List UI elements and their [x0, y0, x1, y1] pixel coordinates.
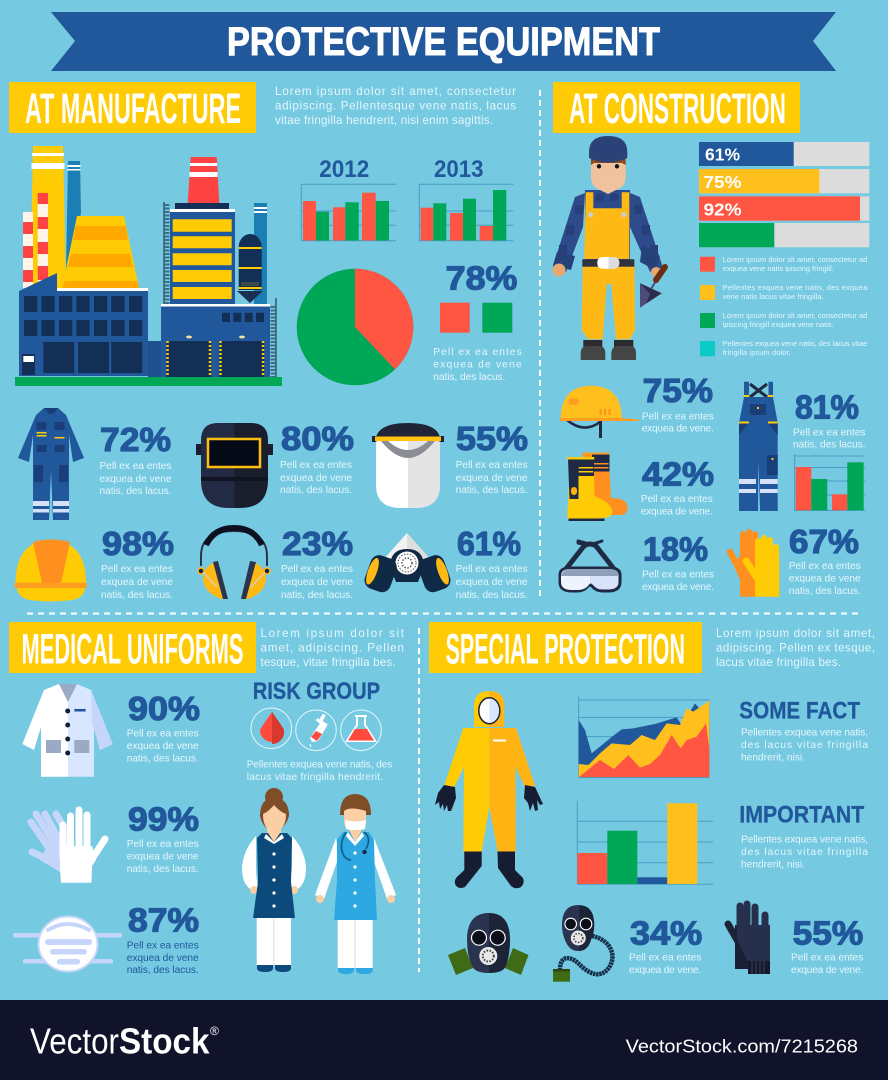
icon: rubber boots [567, 453, 628, 521]
stat: 55%: Pell ex ea entes [456, 460, 528, 471]
stat: 72%: Pell ex ea entes [100, 461, 172, 472]
stat: 78% with legend: 78% [446, 259, 517, 296]
stat: 61%: natis, des lacus. [456, 590, 528, 601]
intro text: special: lacus vitae fringilla bes. [716, 656, 841, 669]
stat: 99%: natis, des lacus. [127, 864, 199, 875]
stat: 55%: natis, des lacus. [456, 485, 528, 496]
icon: bib overalls [739, 382, 778, 511]
chart: 2013 bars: 2013 [434, 156, 484, 183]
text: important: IMPORTANT [739, 801, 865, 828]
stat: 42%: Pell ex ea entes [641, 494, 713, 505]
stat: 55% special [791, 914, 863, 976]
stat: 23% [281, 525, 353, 601]
text: some fact: SOME FACT [739, 698, 860, 725]
stat: 72%: 72% [100, 421, 171, 458]
icon: respirator [362, 533, 453, 595]
stat: 75% [642, 372, 714, 434]
text: important: hendrerit, nisi. [741, 860, 805, 870]
stat: 34% [629, 914, 702, 976]
chart: progress bars: 75% [704, 172, 742, 192]
stat: 23%: Pell ex ea entes [281, 564, 353, 575]
text: risk group: Pellentes exquea vene natis, des [247, 760, 392, 770]
chart: progress bars: 92% [704, 200, 742, 220]
stat: 75%: 75% [643, 372, 713, 409]
stat: 42%: exquea de vene. [641, 506, 713, 518]
icon: syringe [296, 710, 336, 751]
heading: at construction [553, 82, 800, 133]
icon: hard hat [14, 540, 87, 602]
legend: construction: vene natis lacus vitae fringilla. [723, 292, 824, 301]
stat: 81%: 81% [795, 389, 859, 426]
footer watermark bar [0, 1000, 888, 1080]
stat: 80%: natis, des lacus. [280, 485, 352, 496]
stat: 55% [456, 420, 528, 496]
title banner [51, 12, 836, 71]
stat: 34%: Pell ex ea entes [629, 952, 701, 964]
stat: 55% special: Pell ex ea entes [791, 952, 863, 964]
icon: ear muffs [198, 528, 270, 599]
stat: 34%: 34% [630, 914, 702, 951]
text: some fact: hendrerit, nisi. [741, 752, 805, 764]
stat: 87% [127, 902, 199, 976]
chart: 2012 bars: 2012 [319, 156, 369, 183]
stat: 67% [789, 523, 861, 597]
stat: 87%: exquea de vene [127, 953, 199, 964]
stat: 99% [127, 801, 199, 875]
intro text: medical [260, 627, 405, 669]
text: some fact [739, 698, 868, 764]
stat: 98%: natis, des lacus. [101, 590, 173, 601]
stat: 18% [642, 531, 714, 593]
footer watermark bar: Stock [119, 1020, 210, 1061]
stat: 23%: 23% [282, 525, 353, 562]
chart: 2012 bars [301, 156, 396, 241]
stat: 18%: exquea de vene. [642, 582, 714, 593]
icon: welding mask [196, 423, 273, 508]
stat: 90%: Pell ex ea entes [127, 728, 199, 740]
intro text: special [716, 627, 875, 669]
stat: 23%: exquea de vene [281, 577, 353, 588]
illustration: construction worker [552, 136, 665, 360]
intro text: manufacture: vitae fringilla hendrerit, nisi enim sagittis. [275, 114, 493, 127]
icon: surgical mask [13, 916, 122, 972]
icon: black gloves [728, 904, 770, 974]
intro text: special: Lorem ipsum dolor sit amet, [716, 627, 875, 640]
legend: construction: Lorem ipsum dolor sit amet, consectetur ad [723, 311, 867, 320]
title banner: PROTECTIVE EQUIPMENT [227, 20, 660, 64]
stat: 61%: Pell ex ea entes [456, 564, 528, 575]
stat: 99%: 99% [128, 801, 199, 838]
intro text: manufacture [275, 85, 516, 127]
heading: medical uniforms [9, 622, 256, 674]
icon: lab coat [22, 684, 113, 777]
chart: bar chart [577, 801, 713, 884]
figure: nurse [242, 788, 306, 972]
stat: 90%: 90% [128, 690, 200, 727]
icon: flask [341, 710, 381, 751]
legend: construction: Lorem ipsum dolor sit amet, consectetur ad [723, 255, 867, 264]
figure: doctor [315, 794, 396, 974]
intro text: medical: Lorem ipsum dolor sit [260, 627, 405, 640]
heading: medical uniforms: MEDICAL UNIFORMS [22, 626, 243, 674]
legend: construction: exquea vene natis ipiscing fringill. [723, 264, 834, 273]
icon: gas mask with filters [448, 913, 528, 975]
icon: face shield [372, 423, 444, 508]
text: important: Pellentes exquea vene natis, [741, 834, 868, 846]
legend: construction: Pellentes exquea vene natis, des exquea [723, 283, 868, 292]
stat: 61%: 61% [457, 525, 521, 562]
text: some fact: des lacus vitae fringilla [741, 740, 868, 751]
stat: 78% with legend: natis, des lacus. [433, 372, 505, 383]
chart: 2013 bars [419, 156, 513, 241]
chart: area chart [579, 697, 709, 778]
footer watermark bar: ® [210, 1024, 219, 1038]
intro text: medical: tesque, vitae fringilla bes. [260, 656, 396, 669]
stat: 87%: 87% [128, 902, 199, 939]
legend: construction: Pellentes exquea vene natis, des lacus vitae [723, 339, 867, 348]
legend: construction [700, 255, 868, 357]
icon: coverall [18, 408, 84, 520]
stat: 81%: natis, des lacus. [793, 440, 866, 450]
footer watermark bar: VectorStock.com/7215268 [626, 1037, 858, 1057]
icon: work gloves [730, 532, 779, 597]
stat: 81%: Pell ex ea entes [793, 428, 866, 438]
stat: 78% with legend: exquea de vene [433, 360, 522, 370]
stat: 80% [280, 420, 354, 496]
stat: 61%: exquea de vene [456, 577, 528, 588]
stat: 34%: exquea de vene. [629, 965, 701, 976]
chart: mini bars [795, 454, 865, 511]
stat: 18%: Pell ex ea entes [642, 570, 714, 580]
text: important: des lacus vitae fringilla [741, 847, 868, 858]
legend: construction: fringilla ipsum dolor. [723, 348, 791, 357]
stat: 98%: Pell ex ea entes [101, 564, 173, 575]
text: risk group: lacus vitae fringilla hendrerit. [247, 772, 383, 783]
stat: 80%: exquea de vene [280, 473, 352, 484]
figure: hazmat suit [435, 691, 543, 888]
stat: 55%: 55% [456, 420, 528, 457]
legend: construction: ipiscing fringill exquea vene natis. [723, 320, 834, 329]
stat: 99%: exquea de vene [127, 852, 199, 862]
icon: construction helmet [560, 386, 638, 438]
stat: 55%: exquea de vene [456, 473, 528, 484]
heading: risk group: RISK GROUP [253, 678, 380, 705]
intro text: manufacture: adipiscing. Pellentesque vene natis, lacus [275, 100, 516, 112]
stat: 98%: 98% [102, 525, 174, 562]
icon: gas mask with hose [553, 905, 612, 982]
stat: 78% with legend: Pell ex ea entes [433, 347, 522, 358]
intro text: special: adipiscing. Pellen ex tesque, [716, 642, 875, 654]
icon: safety goggles [560, 541, 620, 591]
pie chart [297, 269, 413, 385]
text: risk group [247, 760, 392, 783]
stat: 90% [127, 690, 200, 764]
stat: 98%: exquea de vene [101, 577, 173, 588]
stat: 81% [793, 389, 866, 450]
stat: 67%: exquea de vene [789, 574, 861, 584]
intro text: medical: amet, adipiscing. Pellen [260, 642, 404, 654]
stat: 67%: natis, des lacus. [789, 586, 861, 597]
intro text: manufacture: Lorem ipsum dolor sit amet, consectetur [275, 85, 516, 98]
stat: 42%: 42% [642, 456, 714, 493]
stat: 72% [100, 421, 172, 497]
text: important [739, 801, 868, 870]
stat: 67%: 67% [789, 523, 859, 560]
stat: 90%: natis, des lacus. [127, 754, 199, 764]
stat: 75%: Pell ex ea entes [642, 412, 714, 422]
stat: 55% special: 55% [793, 914, 863, 951]
stat: 80%: Pell ex ea entes [280, 460, 352, 471]
stat: 75%: exquea de vene. [642, 424, 714, 434]
stat: 90%: exquea de vene [127, 741, 199, 752]
stat: 87%: Pell ex ea entes [127, 940, 199, 952]
illustration: factory [15, 146, 282, 386]
stat: 78% with legend [433, 259, 522, 383]
stat: 87%: natis, des lacus. [127, 965, 199, 976]
stat: 23%: natis, des lacus. [281, 590, 353, 601]
stat: 67%: Pell ex ea entes [789, 561, 861, 572]
chart: progress bars [699, 142, 869, 247]
stat: 80%: 80% [281, 420, 354, 457]
icon: blood drop [251, 708, 292, 749]
chart: progress bars: 61% [705, 144, 740, 164]
stat: 55% special: exquea de vene. [791, 965, 863, 976]
stat: 18%: 18% [643, 531, 708, 568]
icon: medical gloves [31, 810, 105, 883]
stat: 72%: exquea de vene [100, 474, 172, 485]
text: some fact: Pellentes exquea vene natis, [741, 728, 868, 738]
footer watermark bar: Vector [30, 1020, 119, 1061]
stat: 72%: natis, des lacus. [100, 486, 172, 497]
heading: special protection [429, 622, 702, 674]
heading: at manufacture [9, 82, 256, 133]
stat: 98% [101, 525, 174, 601]
stat: 42% [641, 456, 714, 518]
stat: 99%: Pell ex ea entes [127, 839, 199, 850]
heading: at manufacture: AT MANUFACTURE [25, 85, 241, 133]
stat: 61% [456, 525, 528, 601]
